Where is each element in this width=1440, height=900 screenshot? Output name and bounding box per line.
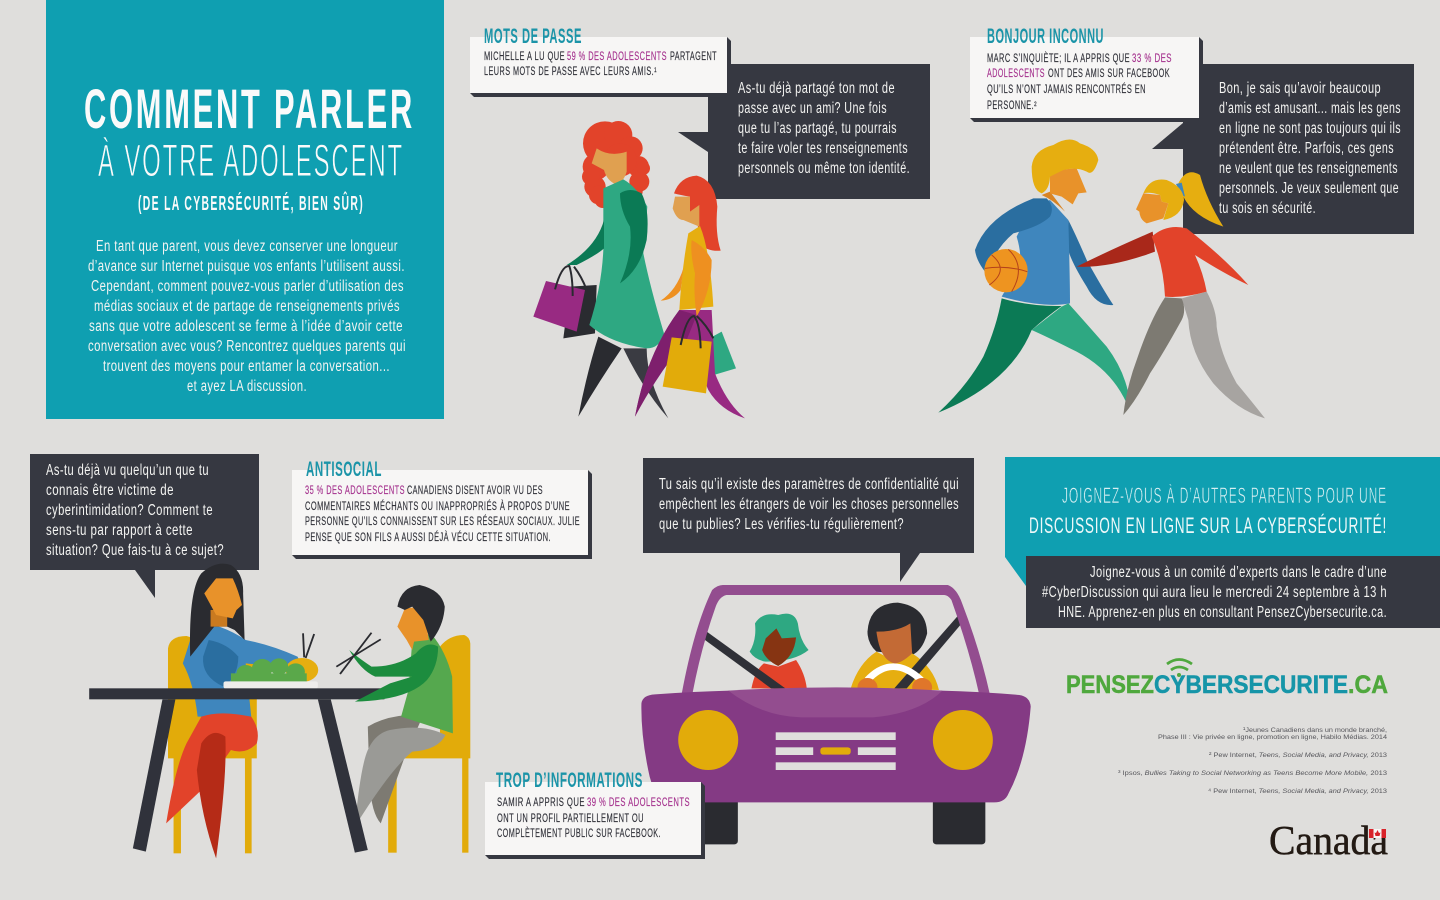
statistic text: LEURS MOTS DE PASSE AVEC LEURS AMIS.¹ [484, 66, 657, 78]
heading: antisocial: ANTISOCIAL [306, 458, 382, 481]
icon: basketball [984, 249, 1028, 292]
statistic text: CANADIENS DISENT AVOIR VU DES [407, 485, 543, 497]
footnotes: Phase III : Vie privée en ligne, promotion en ligne, Habilo Médias. 2014 [1158, 734, 1387, 741]
intro text block: conversation avec vous? Rencontrez quelques parents qui [88, 338, 406, 355]
speech bubble: cyberintimidation: As-tu déjà vu quelqu’un que tu [46, 462, 209, 479]
statistic text [305, 485, 580, 544]
title: (DE LA CYBERSÉCURITÉ, BIEN SÛR) [138, 191, 364, 215]
footnotes: ¹Jeunes Canadiens dans un monde branché, [1243, 727, 1387, 734]
speech bubble: mot de passe: que tu l’as partagé, tu pourrais [738, 120, 897, 137]
intro text block: Cependant, comment pouvez-vous parler d’utilisation des [91, 278, 404, 295]
intro text block: médias sociaux et de partage de renseignements privés [94, 298, 400, 315]
card: trop d'informations [485, 769, 705, 859]
event details [1026, 556, 1440, 628]
footnotes: ² Pew Internet, Teens, Social Media, and Privacy, 2013 [1209, 752, 1387, 759]
statistic text: COMMENTAIRES MÉCHANTS OU INAPPROPRIÉS À PROPOS D’UNE [305, 500, 570, 513]
logo: pensezcybersecurite.ca [1066, 660, 1388, 699]
intro text block [88, 238, 406, 395]
card: antisocial [292, 458, 592, 559]
statistic text: SAMIR A APPRIS QUE [497, 797, 585, 809]
icon: wifi [1167, 660, 1192, 677]
panel: introduction [46, 0, 444, 419]
statistic text: 35 % DES ADOLESCENTS [305, 485, 405, 497]
illustration: mother and daughter shopping [533, 121, 745, 418]
logo: canada wordmark: Canada [1269, 817, 1388, 863]
statistic text: 33 % DES [1132, 53, 1172, 65]
speech bubble: paramètres de confidentialité: que tu publies? Les vérifies-tu régulièrement? [659, 516, 904, 533]
intro text block: sans que votre adolescent se ferme à l’idée d’avoir cette [89, 318, 403, 335]
heading: bonjour inconnu: BONJOUR INCONNU [987, 25, 1104, 48]
speech bubble: paramètres de confidentialité: empêchent les étrangers de voir les choses personnelles [659, 496, 959, 513]
logo: pensezcybersecurite.ca: PENSEZ [1066, 671, 1154, 699]
panel: join the discussion [1005, 457, 1440, 628]
statistic text: MICHELLE A LU QUE [484, 51, 565, 63]
speech bubble: mot de passe: passe avec un ami? Une fois [738, 100, 887, 117]
logo: pensezcybersecurite.ca: CYBERSECURITE [1154, 671, 1348, 699]
intro text block: et ayez LA discussion. [187, 378, 307, 395]
illustration: car with parent and teen [641, 585, 1031, 844]
right chair [388, 635, 470, 853]
statistic text [484, 51, 717, 78]
speech bubble: paramètres de confidentialité [643, 458, 974, 582]
title: À VOTRE ADOLESCENT [98, 135, 404, 186]
card: bonjour inconnu [970, 25, 1203, 122]
statistic text: MARC S’INQUIÈTE; IL A APPRIS QUE [987, 52, 1130, 65]
speech bubble: cyberintimidation: sens-tu par rapport à cette [46, 522, 193, 539]
speech bubble: cyberintimidation: cyberintimidation? Comment te [46, 502, 213, 519]
illustration: mother and son at table [89, 564, 470, 858]
logo: pensezcybersecurite.ca: .CA [1348, 671, 1388, 699]
statistic text [987, 52, 1172, 112]
statistic text: COMPLÈTEMENT PUBLIC SUR FACEBOOK. [497, 827, 661, 840]
left chair [168, 636, 257, 853]
speech bubble: mot de passe: personnels ou même ton identité. [738, 160, 910, 177]
statistic text: ONT UN PROFIL PARTIELLEMENT OU [497, 813, 644, 825]
statistic text: QU’ILS N’ONT JAMAIS RENCONTRÉS EN [987, 83, 1146, 96]
speech bubble: cyberintimidation: connais être victime de [46, 482, 174, 499]
footnotes: ³ Ipsos, Bullies Taking to Social Networking as Teens Become More Mobile, 2013 [1118, 770, 1387, 777]
illustration: father and daughter with basketball [938, 140, 1265, 418]
statistic text: 59 % DES ADOLESCENTS [567, 51, 667, 63]
intro text block: trouvent des moyens pour entamer la conversation... [103, 358, 390, 375]
speech bubble: inconnus en ligne [1152, 64, 1414, 234]
intro text block: d’avance sur Internet puisque vos enfants l’utilisent aussi. [88, 258, 405, 275]
icon: canadian flag [1369, 829, 1386, 838]
speech bubble: mot de passe [678, 64, 930, 199]
statistic text: PERSONNE QU’ILS CONNAISSENT SUR LES RÉSEAUX SOCIAUX. JULIE [305, 515, 580, 528]
speech bubble: cyberintimidation [30, 454, 259, 598]
speech bubble: cyberintimidation: situation? Que fais-tu à ce sujet? [46, 542, 224, 559]
statistic text: ONT DES AMIS SUR FACEBOOK [1048, 68, 1170, 80]
speech bubble: mot de passe: te faire voler tes renseignements [738, 140, 908, 157]
statistic text: 39 % DES ADOLESCENTS [587, 797, 690, 809]
statistic text: PARTAGENT [670, 51, 717, 63]
footnotes: ⁴ Pew Internet, Teens, Social Media, and Privacy, 2013 [1208, 788, 1387, 795]
heading: mots de passe: MOTS DE PASSE [484, 25, 582, 48]
intro text block: En tant que parent, vous devez conserver une longueur [96, 238, 398, 255]
table [89, 688, 384, 853]
heading: trop d'informations: TROP D’INFORMATIONS [496, 769, 643, 792]
statistic text: PENSE QUE SON FILS A AUSSI DÉJÀ VÉCU CETTE SITUATION. [305, 531, 551, 544]
statistic text [497, 797, 690, 840]
speech bubble: inconnus en ligne: tu sois en sécurité. [1219, 200, 1316, 217]
speech bubble: paramètres de confidentialité: Tu sais qu’il existe des paramètres de confidentialité qui [659, 476, 959, 493]
title [84, 77, 415, 215]
title: COMMENT PARLER [84, 77, 415, 140]
footnotes [1118, 727, 1387, 795]
statistic text: ADOLESCENTS [987, 68, 1045, 80]
statistic text: PERSONNE.² [987, 100, 1037, 112]
card: mots de passe [470, 25, 731, 97]
speech bubble: mot de passe: As-tu déjà partagé ton mot de [738, 80, 895, 97]
